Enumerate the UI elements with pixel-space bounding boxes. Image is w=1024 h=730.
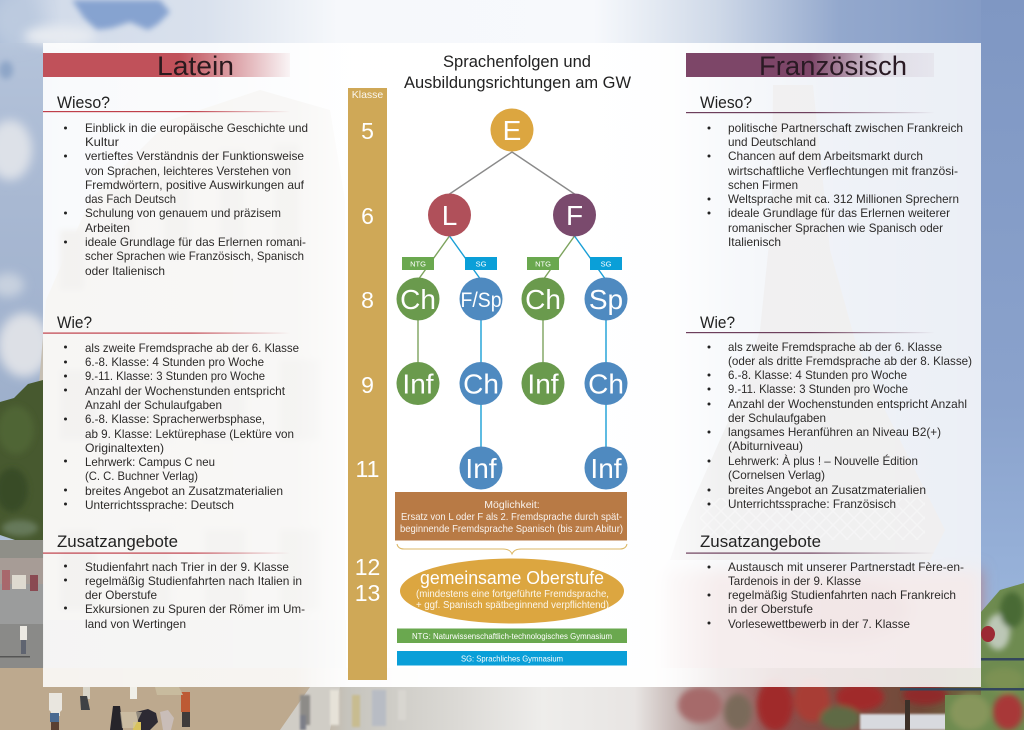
section: Zusatzangebote (686, 532, 964, 631)
tag: NTG (Latein) (402, 257, 434, 270)
section: Zusatzangebote: land von Wertingen (85, 617, 186, 631)
section: Wieso?: ideale Grundlage für das Erlernen weiterer (728, 206, 950, 220)
section: Wieso?: von Sprachen, leichteres Verstehen von (85, 164, 291, 178)
node: Ch SG Latein: Ch (463, 368, 499, 400)
title: Sprachenfolgen und Ausbildungsrichtungen am GW (404, 53, 631, 92)
node: Inf SG Französisch (584, 446, 628, 490)
section: Wie?: Anzahl der Wochenstunden entspricht Anzahl (728, 397, 967, 411)
section: Zusatzangebote: Zusatzangebote (57, 532, 178, 551)
section: Wie?: 6.-8. Klasse: 4 Stunden pro Woche (728, 368, 907, 382)
section: Wie? (686, 313, 972, 511)
section: Wieso?: Chancen auf dem Arbeitsmarkt durch (728, 149, 923, 163)
node: Inf SG Latein: Inf (465, 453, 497, 484)
panel: Latein (43, 51, 308, 631)
section: Wie?: als zweite Fremdsprache ab der 6. Klasse (728, 340, 942, 354)
section: Zusatzangebote: der Oberstufe (85, 588, 157, 602)
node: Inf NTG Latein: Inf (402, 368, 434, 400)
panel: Französisch (686, 51, 972, 631)
legend: NTG (397, 628, 627, 643)
section: Wie?: breites Angebot an Zusatzmaterialien (85, 484, 283, 498)
title bar: Französisch: Französisch (759, 51, 907, 81)
section: Wie?: 9.-11. Klasse: 3 Stunden pro Woche (728, 382, 908, 396)
section: Wie?: Wie? (700, 313, 735, 332)
lower image band (0, 668, 1024, 730)
node: F/Sp under L: F/Sp (460, 289, 502, 312)
section: Wieso?: Schulung von genauem und präzisem (85, 206, 281, 220)
section: Wie?: (Abiturniveau) (728, 439, 803, 453)
grade column: Klasse: 8 (361, 287, 374, 313)
section: Wieso?: Fremdwörtern, positive Auswirkungen auf (85, 178, 305, 192)
legend: SG: SG: Sprachliches Gymnasium (461, 654, 563, 664)
section: Wie?: Wie? (57, 313, 92, 332)
section: Wie?: Unterrichtssprache: Französisch (728, 497, 896, 511)
section: Wieso?: Einblick in die europäische Geschichte und (85, 121, 308, 135)
section: Wieso?: vertieftes Verständnis der Funktionsweise (85, 149, 304, 163)
right garden (900, 583, 1024, 730)
eiffel tower silhouette (670, 85, 945, 560)
brace (397, 544, 627, 554)
tree left (0, 380, 43, 545)
section: Wieso?: und Deutschland (728, 135, 816, 149)
grade column: Klasse: 13 (355, 580, 380, 606)
section: Wie?: Originaltexten) (85, 441, 164, 455)
grade column: Klasse: 12 (355, 554, 380, 580)
section: Wie?: Anzahl der Schulaufgaben (85, 398, 222, 412)
section: Wie?: (oder als dritte Fremdsprache ab der 8. Klasse) (728, 354, 972, 368)
section: Wieso?: wirtschaftliche Verflechtungen mit französi- (727, 164, 958, 178)
section: Zusatzangebote (43, 532, 305, 631)
tag: NTG (Französisch) (527, 257, 559, 270)
section: Wie?: Lehrwerk: Campus C neu (85, 455, 215, 469)
node: Inf SG Latein (460, 446, 502, 490)
section: Wie?: 6.-8. Klasse: Spracherwerbsphase, (85, 412, 265, 426)
node: Ch under F (522, 278, 564, 320)
section: Wieso? (686, 93, 963, 249)
section: Zusatzangebote: regelmäßig Studienfahrten nach Italien in (85, 574, 302, 588)
callout: Möglichkeit: Ersatz von L oder F als 2. Fremdsprache durch spät- (401, 511, 622, 523)
section: Wieso?: das Fach Deutsch (85, 192, 176, 206)
section: Wieso?: Wieso? (57, 93, 110, 112)
section: Wieso?: scher Sprachen wie Französisch, Spanisch (85, 249, 304, 263)
node: Sp under F: Sp (589, 284, 623, 315)
section: Zusatzangebote: in der Oberstufe (728, 602, 813, 616)
node: Inf NTG Latein (396, 362, 440, 405)
clouds (0, 0, 170, 377)
grade column: Klasse (348, 88, 387, 680)
node: Ch SG Latein (460, 362, 502, 405)
callout: Möglichkeit: beginnende Fremdsprache Spanisch (bis zum Abitur) (400, 523, 623, 535)
section: Wieso?: politische Partnerschaft zwischen Frankreich (728, 121, 963, 135)
tag: SG (Französisch) (590, 257, 622, 270)
section: Zusatzangebote: Zusatzangebote (700, 532, 821, 551)
callout: gemeinsame Oberstufe: gemeinsame Oberstufe (420, 568, 604, 588)
section: Wieso?: Weltsprache mit ca. 312 Millionen Sprechern (728, 192, 959, 206)
node: F (553, 194, 596, 236)
node: F/Sp under L (460, 278, 502, 320)
callout: gemeinsame Oberstufe: (mindestens eine fortgeführte Fremdsprache, (416, 589, 609, 600)
section: Wie? (43, 313, 299, 512)
section: Wieso?: romanischer Sprachen wie Spanisch oder (728, 221, 943, 235)
section: Wieso?: ideale Grundlage für das Erlernen romani- (85, 235, 306, 249)
section: Zusatzangebote: Exkursionen zu Spuren der Römer im Um- (85, 602, 305, 616)
section: Wieso?: Kultur (85, 135, 119, 149)
callout: gemeinsame Oberstufe: + ggf. Spanisch spätbeginnend verpflichtend) (416, 600, 609, 611)
callout: Möglichkeit (395, 492, 627, 540)
section: Wie?: (C. C. Buchner Verlag) (85, 469, 198, 483)
section: Zusatzangebote: Austausch mit unserer Partnerstadt Fère-en- (728, 560, 964, 574)
node: L: L (442, 200, 457, 231)
grade column: Klasse: 11 (356, 456, 379, 482)
node: Ch under F: Ch (525, 284, 561, 315)
grade column: Klasse: 6 (361, 203, 374, 229)
node: Inf NTG Französisch (522, 362, 564, 405)
section: Wie?: Unterrichtssprache: Deutsch (85, 498, 234, 512)
section: Wie?: langsames Heranführen an Niveau B2(+) (728, 425, 941, 439)
tag: NTG (Latein): NTG (410, 260, 426, 268)
tag: SG (Latein): SG (476, 260, 487, 268)
node: Inf SG Französisch: Inf (590, 453, 622, 484)
legend: NTG: NTG: Naturwissenschaftlich-technologisches Gymnasium (412, 631, 612, 641)
node: Sp under F (584, 278, 628, 320)
grade column: Klasse: 9 (361, 372, 374, 398)
section: Wieso?: Wieso? (700, 93, 752, 112)
callout: Möglichkeit: Möglichkeit: (484, 499, 540, 511)
node: Ch SG Französisch (584, 362, 628, 405)
grade column: Klasse: 5 (361, 118, 374, 144)
node: F: F (566, 200, 583, 231)
section: Wie?: breites Angebot an Zusatzmaterialien (728, 483, 926, 497)
node: Ch under L: Ch (400, 284, 436, 315)
section: Wie?: 6.-8. Klasse: 4 Stunden pro Woche (85, 355, 264, 369)
title: Sprachenfolgen und Ausbildungsrichtungen am GW: Sprachenfolgen und (443, 53, 591, 71)
title bar: Französisch (686, 51, 934, 81)
tag: NTG (Französisch): NTG (535, 260, 551, 268)
section: Wie?: Lehrwerk: À plus ! – Nouvelle Édition (728, 453, 918, 468)
tag: SG (Latein) (465, 257, 497, 270)
colosseum silhouette (36, 90, 346, 690)
section: Zusatzangebote: Vorlesewettbewerb in der 7. Klasse (728, 617, 910, 631)
section: Zusatzangebote: Tardenois in der 9. Klasse (728, 574, 861, 588)
ground left (0, 540, 44, 558)
section: Wie?: 9.-11. Klasse: 3 Stunden pro Woche (85, 369, 265, 383)
flowering trees under panel (660, 570, 980, 695)
section: Wie?: ab 9. Klasse: Lektürephase (Lektüre von (85, 427, 294, 441)
title bar: Latein (43, 51, 290, 81)
section: Wie?: Anzahl der Wochenstunden entspricht (85, 384, 286, 398)
section: Wieso?: oder Italienisch (85, 264, 165, 278)
title bar: Latein: Latein (157, 51, 234, 81)
title: Sprachenfolgen und Ausbildungsrichtungen am GW: Ausbildungsrichtungen am GW (404, 74, 631, 92)
legend: SG (397, 651, 627, 666)
node: E: E (503, 115, 521, 146)
section: Zusatzangebote: Studienfahrt nach Trier in der 9. Klasse (85, 560, 289, 574)
node: Ch SG Französisch: Ch (588, 368, 624, 400)
section: Wieso? (43, 93, 308, 278)
node: E (490, 108, 534, 152)
section: Wieso?: Arbeiten (85, 221, 130, 235)
section: Wieso?: schen Firmen (728, 178, 798, 192)
section: Wieso?: Italienisch (728, 235, 781, 249)
section: Wie?: der Schulaufgaben (728, 411, 826, 425)
section: Wie?: als zweite Fremdsprache ab der 6. Klasse (85, 341, 299, 355)
tourists (0, 570, 190, 730)
tag: SG (Französisch): SG (601, 260, 612, 268)
connector lines (418, 152, 606, 447)
section: Zusatzangebote: regelmäßig Studienfahrten nach Frankreich (728, 588, 956, 602)
callout: gemeinsame Oberstufe (400, 558, 624, 624)
node: Ch under L (396, 278, 440, 320)
node: L (428, 194, 471, 236)
grade column: Klasse: Klasse (352, 89, 383, 101)
node: Inf NTG Französisch: Inf (527, 368, 559, 400)
section: Wie?: (Cornelsen Verlag) (728, 468, 825, 482)
